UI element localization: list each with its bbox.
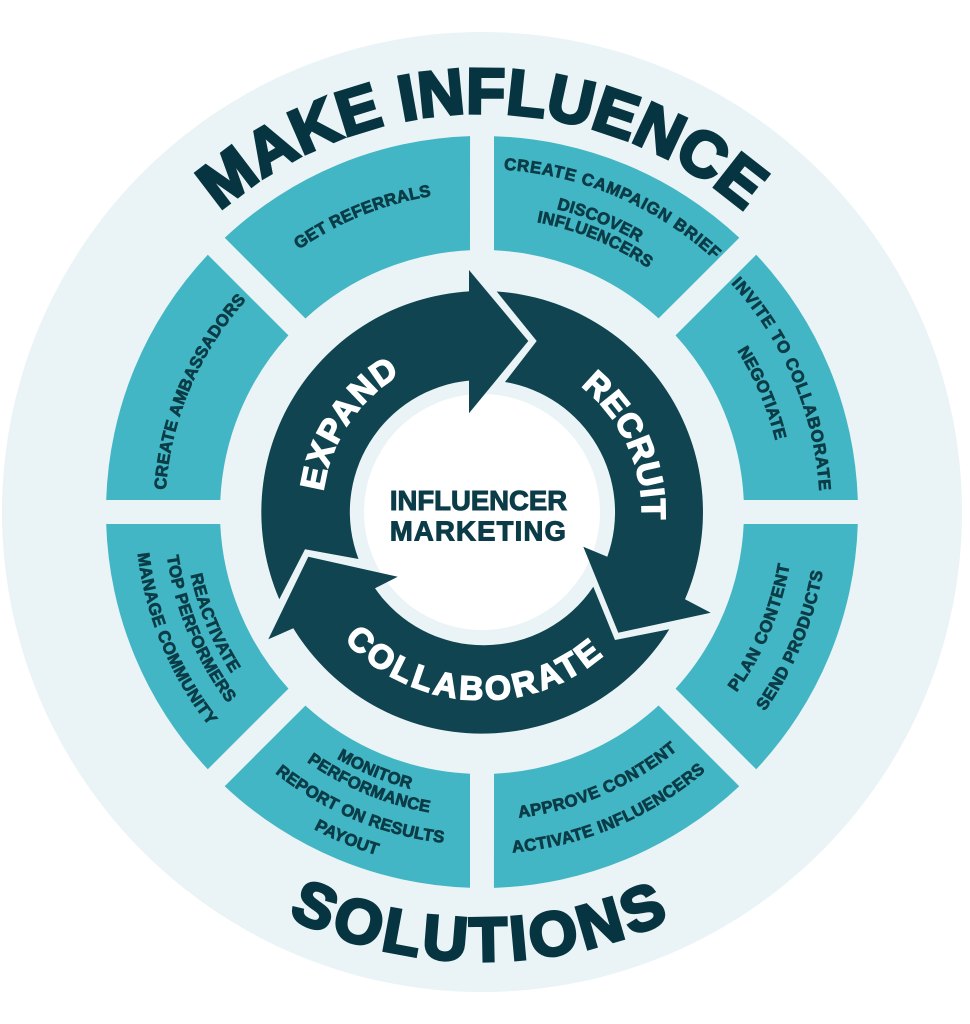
center label: INFLUENCER [390, 485, 567, 516]
panel: monitor, report and payout: REPORT ON RESULTS [275, 764, 444, 843]
arrow: recruit [496, 292, 711, 633]
panel: invite and negotiate: INVITE TO COLLABORATE [731, 276, 832, 490]
panel: reactivate and manage community: REACTIVATE [190, 572, 242, 674]
panel: monitor, report and payout: MONITOR [337, 748, 412, 790]
panel: plan content and send products: SEND PRODUCTS [756, 570, 822, 710]
panel: invite and negotiate [676, 254, 858, 500]
panel: reactivate and manage community: TOP PERFORMERS [167, 554, 236, 702]
panel: plan content and send products: PLAN CONTENT [727, 562, 790, 692]
center label: MARKETING [390, 516, 567, 546]
panel: brief and discovery [494, 136, 740, 318]
center white circle [364, 394, 600, 630]
panel: monitor, report and payout [224, 706, 470, 888]
panel: monitor, report and payout: PAYOUT [314, 818, 380, 854]
panel: brief and discovery: DISCOVER [557, 198, 643, 242]
arrow: expand [261, 270, 528, 600]
title: make influence: MAKE INFLUENCE [194, 67, 772, 212]
panel: monitor, report and payout: PERFORMANCE [307, 752, 431, 813]
panel: approve and activate: ACTIVATE INFLUENCERS [512, 764, 704, 853]
panel: create ambassadors: CREATE AMBASSADORS [154, 294, 245, 490]
panel: get referrals: GET REFERRALS [294, 184, 430, 248]
panel: create ambassadors [106, 254, 288, 500]
arrow: recruit: RECRUIT [582, 369, 666, 520]
panel: approve and activate: APPROVE CONTENT [518, 740, 675, 818]
panel: reactivate and manage community: MANAGE COMMUNITY [137, 552, 218, 723]
title: solutions: SOLUTIONS [292, 882, 666, 963]
arrow: collaborate [268, 556, 670, 734]
panel: get referrals [224, 136, 470, 318]
panel: plan content and send products [676, 524, 858, 770]
panel: brief and discovery: CREATE CAMPAIGN BRIEF [504, 158, 722, 256]
arrow: collaborate: COLLABORATE [348, 627, 604, 700]
panel: approve and activate [494, 706, 740, 888]
panel: brief and discovery: INFLUENCERS [538, 210, 653, 267]
arrow: expand: EXPAND [300, 360, 396, 490]
center label [390, 485, 567, 546]
panel: reactivate and manage community [106, 524, 288, 770]
panel: invite and negotiate: NEGOTIATE [737, 345, 787, 440]
